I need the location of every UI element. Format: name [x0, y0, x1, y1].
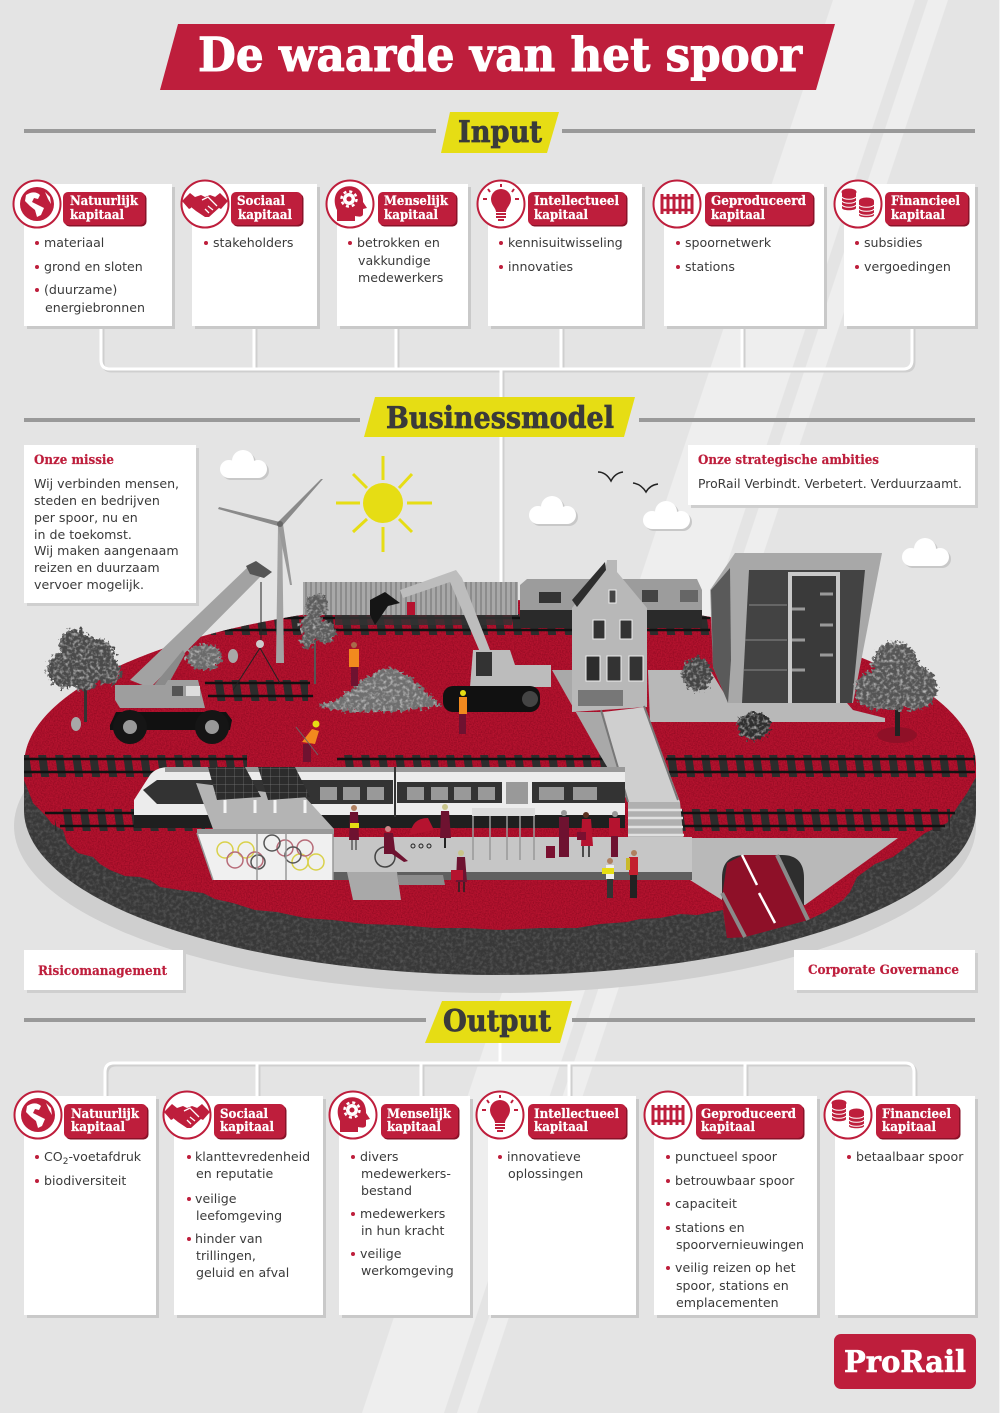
teen with backpack: [626, 850, 638, 898]
man with suitcase: [546, 810, 569, 858]
input card: sociaal kapitaal: Sociaal: [237, 194, 285, 209]
input card: sociaal kapitaal: [182, 180, 320, 329]
soil: [24, 770, 976, 975]
output card: sociaal kapitaal: kapitaal: [220, 1120, 274, 1135]
output card: natuurlijk kapitaal: CO: [44, 1149, 63, 1164]
icon: sun: [336, 456, 432, 552]
output card: geproduceerd kapitaal: veilig reizen op het: [675, 1260, 796, 1275]
woman with red bag: [451, 850, 467, 892]
input card: financieel kapitaal: vergoedingen: [864, 259, 951, 274]
output card: sociaal kapitaal: Sociaal: [220, 1107, 268, 1122]
bush: [186, 644, 222, 670]
output card: menselijk kapitaal: werkomgeving: [361, 1263, 454, 1278]
output card: geproduceerd kapitaal: stations en: [675, 1220, 745, 1235]
output card: geproduceerd kapitaal: Geproduceerd: [701, 1107, 796, 1122]
output card: sociaal kapitaal: veilige: [195, 1191, 237, 1206]
input card: natuurlijk kapitaal: [14, 180, 175, 329]
output card: sociaal kapitaal: trillingen,: [196, 1248, 256, 1263]
input card: menselijk kapitaal: vakkundige: [358, 253, 431, 268]
output card: menselijk kapitaal: medewerkers-: [361, 1166, 451, 1181]
input card: natuurlijk kapitaal: Natuurlijk: [70, 194, 139, 209]
worker with shovel: [296, 720, 320, 762]
output card: natuurlijk kapitaal: 2: [63, 1157, 68, 1167]
panel: strategische ambities: [688, 445, 978, 508]
input card: natuurlijk kapitaal: (duurzame): [44, 282, 117, 297]
output card: menselijk kapitaal: veilige: [360, 1246, 402, 1261]
heading: Input: Input: [458, 115, 542, 150]
input card: intellectueel kapitaal: [478, 180, 645, 329]
panel: onze missie: reizen en duurzaam: [34, 560, 160, 575]
input card: natuurlijk kapitaal: kapitaal: [70, 208, 124, 223]
panel: onze missie: Wij maken aangenaam: [34, 543, 179, 558]
output card: natuurlijk kapitaal: Natuurlijk: [71, 1107, 140, 1122]
input card: sociaal kapitaal: stakeholders: [213, 235, 293, 250]
input card: financieel kapitaal: subsidies: [864, 235, 922, 250]
tree: right: [855, 642, 937, 743]
train: [134, 767, 625, 828]
worker with tablet: [459, 690, 467, 734]
title banner: De waarde van het spoor: [198, 28, 803, 83]
panel: onze missie: vervoer mogelijk.: [34, 577, 144, 592]
input card: menselijk kapitaal: kapitaal: [384, 208, 438, 223]
output card: menselijk kapitaal: divers: [360, 1149, 398, 1164]
input card: menselijk kapitaal: medewerkers: [358, 270, 443, 285]
panel: onze missie: per spoor, nu en: [34, 510, 138, 525]
woman in red dress: [577, 812, 593, 857]
output card: geproduceerd kapitaal: [644, 1092, 820, 1318]
bush: lawn: [737, 712, 771, 740]
input card: intellectueel kapitaal: kennisuitwisseling: [508, 235, 623, 250]
panel: strategische ambities: Onze strategische ambities: [698, 453, 879, 468]
heading: Businessmodel: Businessmodel: [386, 401, 614, 436]
output card: financieel kapitaal: [824, 1092, 978, 1318]
output card: sociaal kapitaal: en reputatie: [196, 1166, 273, 1181]
panel: onze missie: Wij verbinden mensen,: [34, 476, 179, 491]
output card: natuurlijk kapitaal: biodiversiteit: [44, 1173, 126, 1188]
tunnel and road: [722, 855, 808, 938]
house: [572, 560, 647, 712]
woman with pram: [410, 804, 451, 848]
input card: geproduceerd kapitaal: stations: [685, 259, 735, 274]
tree: centre: [300, 594, 336, 684]
crane: [110, 561, 280, 744]
output card: geproduceerd kapitaal: emplacementen: [676, 1295, 779, 1310]
icon: wind turbine: [218, 479, 323, 663]
heading: Output: Output: [443, 1004, 551, 1039]
office building: [710, 553, 882, 703]
rabbits: [71, 649, 238, 731]
panel: strategische ambities: ProRail Verbindt. Verbetert. Verduurzaamt.: [698, 476, 962, 491]
output card: menselijk kapitaal: Menselijk: [387, 1107, 452, 1122]
output card: natuurlijk kapitaal: [14, 1092, 159, 1318]
output card: geproduceerd kapitaal: punctueel spoor: [675, 1149, 778, 1164]
output card: sociaal kapitaal: geluid en afval: [196, 1265, 289, 1280]
person in wheelchair: [375, 826, 408, 867]
input card: geproduceerd kapitaal: Geproduceerd: [711, 194, 806, 209]
woman waiting: [349, 805, 359, 850]
panel: onze missie: steden en bedrijven: [34, 493, 160, 508]
output card: sociaal kapitaal: klanttevredenheid: [195, 1149, 310, 1164]
panel: corporate governance: [794, 950, 978, 993]
input card: menselijk kapitaal: [326, 180, 471, 329]
input card: financieel kapitaal: [834, 180, 978, 329]
logo: ProRail: [834, 1334, 976, 1389]
input card: menselijk kapitaal: betrokken en: [357, 235, 440, 250]
panel: onze missie: in de toekomst.: [34, 527, 132, 542]
input card: geproduceerd kapitaal: kapitaal: [711, 208, 765, 223]
heading: Output: [425, 1001, 572, 1043]
illustration: island with railway: [14, 479, 976, 993]
input card: intellectueel kapitaal: innovaties: [508, 259, 573, 274]
waiting shelter: [472, 808, 535, 860]
connector: output: [105, 1040, 916, 1096]
woman in red jacket: [609, 811, 620, 857]
worker by gravel: [349, 642, 359, 686]
divider lines: [24, 129, 975, 1022]
output card: geproduceerd kapitaal: kapitaal: [701, 1120, 755, 1135]
panel: onze missie: [24, 445, 199, 606]
output card: financieel kapitaal: kapitaal: [882, 1120, 936, 1135]
output card: intellectueel kapitaal: oplossingen: [508, 1166, 583, 1181]
input card: natuurlijk kapitaal: energiebronnen: [45, 300, 145, 315]
tree: left: [47, 629, 121, 722]
output card: geproduceerd kapitaal: capaciteit: [675, 1196, 737, 1211]
output card: financieel kapitaal: betaalbaar spoor: [856, 1149, 964, 1164]
clouds: [220, 450, 951, 568]
gravel pile: [317, 667, 443, 712]
tracks: [24, 614, 975, 831]
panel: corporate governance: Corporate Governance: [808, 963, 959, 978]
stairs and bridge: [601, 706, 685, 855]
bush: building: [682, 657, 712, 691]
panel: risicomanagement: [24, 950, 186, 993]
input card: financieel kapitaal: kapitaal: [891, 208, 945, 223]
input card: intellectueel kapitaal: kapitaal: [534, 208, 588, 223]
panel: onze missie: Onze missie: [34, 453, 114, 468]
output card: natuurlijk kapitaal: kapitaal: [71, 1120, 125, 1135]
icon: birds: [598, 472, 658, 492]
output card: financieel kapitaal: Financieel: [882, 1107, 951, 1122]
tunnel wall: [683, 838, 898, 905]
output card: menselijk kapitaal: in hun kracht: [361, 1223, 445, 1238]
output card: menselijk kapitaal: kapitaal: [387, 1120, 441, 1135]
platform: [333, 837, 692, 900]
output card: geproduceerd kapitaal: spoorvernieuwingen: [676, 1237, 804, 1252]
input card: natuurlijk kapitaal: materiaal: [44, 235, 104, 250]
bike shelter with solar panels: [196, 767, 334, 880]
logo: ProRail: ProRail: [844, 1345, 966, 1380]
container wagons: [303, 582, 518, 625]
output card: natuurlijk kapitaal: -voetafdruk: [68, 1149, 142, 1164]
input card: financieel kapitaal: Financieel: [891, 194, 960, 209]
panel: risicomanagement: Risicomanagement: [38, 964, 167, 979]
connector: input to businessmodel: [101, 326, 914, 620]
input card: sociaal kapitaal: kapitaal: [238, 208, 292, 223]
concrete grounds: [552, 670, 885, 805]
input card: geproduceerd kapitaal: [654, 180, 827, 329]
output card: menselijk kapitaal: [330, 1092, 473, 1318]
output card: sociaal kapitaal: leefomgeving: [196, 1208, 282, 1223]
excavator: [370, 570, 551, 712]
output card: intellectueel kapitaal: [476, 1092, 639, 1318]
output card: sociaal kapitaal: [164, 1092, 326, 1318]
input card: menselijk kapitaal: Menselijk: [384, 194, 449, 209]
locomotive: [520, 579, 702, 628]
output card: menselijk kapitaal: medewerkers: [360, 1206, 445, 1221]
input card: natuurlijk kapitaal: grond en sloten: [44, 259, 143, 274]
output card: geproduceerd kapitaal: spoor, stations en: [676, 1278, 789, 1293]
red ground: [24, 600, 976, 938]
output card: geproduceerd kapitaal: betrouwbaar spoor: [675, 1173, 795, 1188]
output card: intellectueel kapitaal: innovatieve: [507, 1149, 581, 1164]
output card: sociaal kapitaal: hinder van: [195, 1231, 263, 1246]
output card: intellectueel kapitaal: Intellectueel: [534, 1107, 619, 1122]
output card: intellectueel kapitaal: kapitaal: [534, 1120, 588, 1135]
input card: intellectueel kapitaal: Intellectueel: [534, 194, 619, 209]
passengers and workers: [296, 642, 638, 898]
island shadow: [14, 659, 976, 993]
child: [602, 858, 614, 898]
input card: geproduceerd kapitaal: spoornetwerk: [685, 235, 772, 250]
heading: Input: [441, 112, 559, 153]
output card: menselijk kapitaal: bestand: [361, 1183, 412, 1198]
